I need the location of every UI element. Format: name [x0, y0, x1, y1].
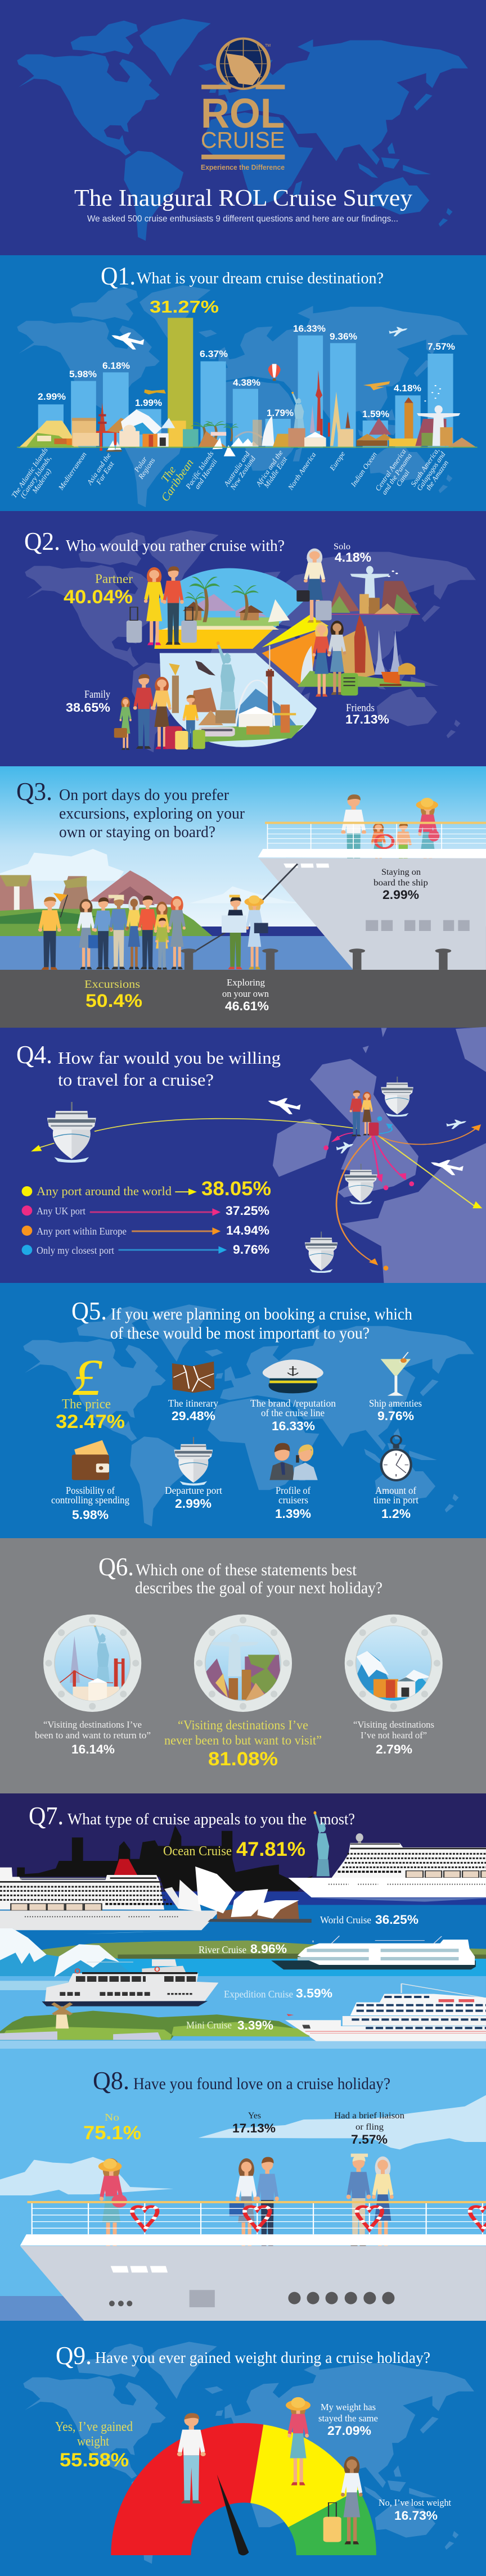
Q9 background — [0, 2321, 486, 2576]
Q9 label: stayed the same — [318, 2402, 378, 2438]
friends pair — [313, 621, 358, 697]
Q1 rotated destination labels: Canal — [394, 468, 411, 488]
Q3 label: exploring — [222, 977, 269, 1013]
ship hull — [258, 794, 486, 970]
Q2 label: solo: Solo — [334, 542, 350, 552]
Q1 rotated destination labels: the Amazon — [424, 459, 450, 492]
panel: Q7 type of cruise — [0, 1793, 486, 2049]
Q1 rotated destination labels: South America, — [409, 446, 441, 488]
Q3 label: exploring: 46.61% — [225, 999, 269, 1013]
Q8 label: brief liaison: or fling — [356, 2122, 384, 2132]
Q2 label: friends — [345, 702, 389, 726]
Q4 heading — [16, 1040, 281, 1090]
Q1 percentage labels: 9.36% — [330, 331, 357, 342]
option: the price — [56, 1349, 125, 1432]
Q5 heading: If you were planning on booking a cruise, which — [111, 1305, 412, 1323]
option: profile of cruisers: 1.39% — [275, 1507, 311, 1521]
Q8 label: no: 75.1% — [83, 2122, 141, 2144]
option: departure port — [165, 1437, 222, 1511]
Q1 rotated destination labels: The Atlantic Islands — [10, 446, 50, 499]
Q1 rotated destination labels: Regions — [136, 457, 156, 481]
Q3 heading: excursions, exploring on your — [59, 805, 245, 822]
partner couple — [127, 566, 197, 645]
Q1 rotated destination labels: Middle East — [262, 455, 289, 490]
ship: mini cruise — [285, 1983, 486, 2041]
statue of liberty — [313, 1811, 330, 1876]
Q1 heading — [101, 261, 384, 290]
option: ship amenities: 9.76% — [377, 1409, 414, 1423]
gauge needle — [217, 2475, 249, 2555]
Q2 pie illustration — [114, 549, 425, 750]
bollards — [181, 948, 451, 970]
Q2 label: family: 38.65% — [66, 701, 110, 715]
option: controlling spending: controlling spending — [51, 1494, 129, 1506]
Q4 heading: to travel for a cruise? — [58, 1070, 214, 1090]
Q1 percentage labels: 16.33% — [293, 323, 326, 334]
Q8 label: yes — [232, 2111, 276, 2135]
option: the itinerary: The itinerary — [168, 1398, 218, 1409]
Q9 label: gained: weight — [77, 2434, 109, 2449]
river banks — [0, 1941, 486, 1958]
Q4 background — [0, 1028, 486, 1283]
Q2 label: partner: Partner — [95, 572, 133, 586]
option: profile of cruisers — [269, 1443, 318, 1521]
Q7 label: ocean cruise — [163, 1838, 305, 1860]
Q1 rotated destination labels: Europe — [327, 450, 346, 472]
hero world map — [17, 19, 468, 241]
Q2 label: solo — [334, 542, 371, 564]
Q7 heading: Q7. — [29, 1801, 64, 1830]
Q2 world map — [25, 530, 476, 752]
panel: Q9 weight gain — [0, 2321, 486, 2576]
Q1 rotated destination labels: Pacific Islands — [183, 449, 215, 491]
Q1 rotated destination labels — [10, 446, 453, 508]
Q9 label: gained: Yes, I’ve gained — [55, 2420, 133, 2434]
ROL Cruise logo: Experience the Difference — [201, 164, 285, 171]
Q1 percentage labels: 6.37% — [200, 349, 228, 359]
Q8 label: no — [83, 2112, 141, 2144]
ship deck and hull — [20, 2234, 486, 2321]
Q3 label: excursions — [84, 978, 142, 1011]
Q7 label: world cruise: World Cruise — [320, 1914, 371, 1926]
Q1 rotated destination labels: The — [159, 464, 178, 485]
solo traveller — [296, 549, 332, 623]
Q1 percentage labels: 7.57% — [428, 341, 455, 352]
option: brand reputation: of the cruise line — [261, 1407, 325, 1418]
Q4 heading: Q4. — [16, 1040, 52, 1069]
Q6 label: not heard of — [353, 1719, 434, 1756]
Q1 rotated destination labels: Madeira) — [30, 467, 53, 495]
Q1 heading: What is your dream cruise destination? — [137, 270, 384, 287]
ROL Cruise logo — [201, 38, 285, 171]
Q7 label: world cruise — [320, 1913, 418, 1927]
Q7 label: mini cruise: Mini Cruise — [186, 2019, 232, 2031]
Q7 scene — [0, 1793, 486, 2049]
Q2 label: partner: 40.04% — [64, 586, 133, 608]
Q9 label: lost weight — [379, 2497, 451, 2523]
Q2 heading: Who would you rather cruise with? — [66, 537, 285, 555]
Q1 percentage labels: 6.18% — [102, 360, 130, 371]
hero background — [0, 0, 486, 255]
Q6 heading: describes the goal of your next holiday? — [135, 1579, 382, 1597]
Q1 rotated destination labels: Australia and — [222, 450, 251, 488]
green island and windmill — [0, 2003, 310, 2040]
Q6 label: never been — [164, 1718, 322, 1770]
Q9 label: gained: 55.58% — [60, 2450, 129, 2471]
Q3 label: staying on board — [374, 867, 428, 902]
Q5 heading — [71, 1296, 412, 1343]
Q3 heading: own or staying on board? — [59, 823, 215, 841]
Q6 label: not heard of: I’ve not heard of” — [361, 1730, 427, 1741]
Q1 percentage labels: 4.38% — [233, 377, 260, 388]
Q1 rotated destination labels: Caribbean — [159, 457, 196, 504]
icon: wallet — [72, 1440, 109, 1480]
Q2 label: solo: 4.18% — [335, 550, 371, 564]
Q6 label: never been: never been to but want to visit” — [164, 1733, 322, 1747]
Q1 heading: Q1. — [101, 261, 136, 290]
Q2 heading: Q2. — [24, 527, 60, 555]
hero title: The Inaugural ROL Cruise Survey — [74, 186, 412, 211]
Q4 heading: How far would you be willing — [58, 1048, 281, 1068]
Q7 label: expedition cruise: 3.59% — [296, 1986, 332, 2000]
Q3 label: exploring: Exploring — [227, 977, 265, 988]
Q4 legend: Only my closest port — [37, 1245, 114, 1256]
icon: martini glass — [381, 1352, 411, 1396]
Q1 rotated destination labels: Africa and the — [254, 449, 285, 489]
heart life rings — [132, 2207, 486, 2230]
porthole: new destinations — [194, 1615, 292, 1712]
Q7 heading: What type of cruise appeals to you the — [68, 1810, 307, 1828]
option: brand reputation — [250, 1359, 336, 1433]
porthole: unknown destinations — [345, 1615, 443, 1712]
Q1 percentage labels — [38, 297, 455, 419]
Q6 heading: Which one of these statements best — [136, 1561, 357, 1579]
Q1 rotated destination labels: and the Panama — [380, 451, 413, 496]
option: controlling spending: Possibility of — [66, 1485, 115, 1496]
option: ship amenities: Ship amenties — [369, 1398, 422, 1409]
Q1 rotated destination labels: (Canary Islands, — [18, 454, 53, 499]
snowy mountains — [0, 1928, 136, 1990]
Q8 heading: Q8. — [93, 2066, 129, 2095]
ship: expedition cruise — [42, 1959, 218, 2006]
option: time in port — [374, 1436, 418, 1521]
option: controlling spending — [51, 1440, 129, 1522]
panel: Q6 holiday goal — [0, 1538, 486, 1793]
man in shorts — [177, 2413, 206, 2503]
Q7 label: world cruise: 36.25% — [375, 1913, 418, 1927]
panel: Q5 most important factors — [0, 1283, 486, 1538]
Q1 percentage labels: 2.99% — [38, 391, 66, 402]
Q1 percentage labels: 1.79% — [267, 408, 294, 418]
Q8 label: brief liaison: Had a brief liaison — [334, 2111, 404, 2121]
Q7 label: ocean cruise: Ocean Cruise — [163, 1844, 232, 1859]
option: time in port: time in port — [374, 1494, 418, 1506]
Q6 background — [0, 1538, 486, 1793]
Q8 background — [0, 2049, 486, 2321]
Q1 rotated destination labels: Indian Ocean — [349, 450, 379, 489]
Q2 label: family: Family — [84, 689, 110, 701]
Q9 gauge chart — [111, 2397, 376, 2555]
ship: ocean cruise left — [0, 1859, 220, 1934]
Q2 label: friends: 17.13% — [345, 712, 389, 726]
Q6 label: never been: “Visiting destinations I’ve — [178, 1718, 308, 1732]
Q1 rotated destination labels: and Hawaii — [192, 457, 219, 491]
water — [0, 2296, 84, 2321]
hero subtitle: We asked 500 cruise enthusiasts 9 different questions and here are our findings... — [87, 214, 398, 224]
Q5 heading: Q5. — [71, 1296, 107, 1325]
Q1 percentage labels: 5.98% — [69, 369, 97, 379]
Q7 heading: most? — [320, 1810, 355, 1828]
Q3 label: staying on board: board the ship — [374, 878, 428, 888]
option: the price: 32.47% — [56, 1411, 125, 1432]
Q9 label: stayed the same: 27.09% — [327, 2424, 371, 2438]
porthole: return destinations — [43, 1615, 141, 1712]
Q8 label: brief liaison: 7.57% — [351, 2132, 388, 2146]
Q1 percentage labels: 1.59% — [362, 409, 389, 419]
woman with sun hat — [286, 2397, 310, 2485]
Q7 label: mini cruise: 3.39% — [237, 2018, 273, 2032]
Q4 legend: Any port within Europe — [37, 1226, 127, 1237]
Q4 legend: 14.94% — [226, 1223, 269, 1237]
option: time in port: Amount of — [375, 1485, 416, 1496]
Q6 label: not heard of: 2.79% — [376, 1742, 412, 1756]
Q3 scene illustration — [0, 794, 486, 971]
Q1 bar chart — [38, 318, 453, 448]
woman with suitcase — [323, 2456, 363, 2545]
Q8 label: brief liaison — [334, 2111, 404, 2146]
Q9 heading: Have you ever gained weight during a cruise holiday? — [95, 2349, 430, 2367]
Q3 label: staying on board: Staying on — [381, 867, 421, 877]
Q1 background — [0, 255, 486, 511]
Q5 heading: of these would be most important to you? — [110, 1324, 370, 1343]
Q6 label: return: 16.14% — [71, 1742, 115, 1756]
Q6 label: return: “Visiting destinations I’ve — [43, 1719, 142, 1730]
option: brand reputation: The brand /reputation — [250, 1398, 336, 1409]
Q9 label: lost weight: 16.73% — [394, 2509, 438, 2523]
panel: Q4 how far would you travel — [0, 1027, 486, 1289]
option: ship amenities — [369, 1352, 422, 1423]
Q1 rotated destination labels: Central America — [374, 447, 408, 492]
tour group — [38, 893, 186, 970]
Q7 label: expedition cruise: Expedition Cruise — [224, 1989, 293, 2000]
Q8 label: yes: Yes — [248, 2111, 261, 2121]
Q1 rotated destination labels: Polar — [132, 455, 149, 474]
family group — [114, 674, 205, 750]
Q1 landmark skyline illustration — [17, 327, 478, 457]
wedge: partner — [127, 566, 305, 649]
icon: stopwatch — [380, 1436, 412, 1481]
Q7 label: river cruise: River Cruise — [199, 1944, 246, 1955]
ship: world cruise right — [288, 1833, 486, 1902]
porthole windows — [43, 1615, 443, 1712]
Q9 label: stayed the same: My weight has — [321, 2402, 376, 2412]
Q2 label: partner — [64, 572, 133, 608]
Q6 label: return — [35, 1719, 151, 1756]
icon: folded map — [172, 1362, 214, 1393]
Q2 background — [0, 511, 486, 766]
Q9 label: gained — [55, 2420, 133, 2471]
Q1 percentage labels: 4.18% — [394, 383, 421, 394]
Q1 rotated destination labels: North America — [286, 450, 318, 492]
mooring rope — [189, 864, 298, 955]
Q7 label: mini cruise — [186, 2018, 273, 2032]
option: the itinerary — [168, 1362, 218, 1423]
Q3 label: excursions: Excursions — [84, 978, 140, 991]
option: the price: The price — [62, 1397, 111, 1412]
Q7 label: ocean cruise: 47.81% — [236, 1838, 305, 1860]
Q2 label: family — [66, 689, 110, 715]
Q5 background — [0, 1283, 486, 1538]
Q1 percentage labels: 31.27% — [150, 297, 219, 317]
Q1 rotated destination labels: Galapagos and — [415, 450, 447, 492]
sydney opera house — [164, 1867, 312, 1923]
travelling couple — [350, 1090, 379, 1136]
city skyline — [17, 1825, 313, 1891]
Q3 dock — [0, 970, 486, 1028]
Q4 legend: 38.05% — [201, 1178, 271, 1200]
icon: two people — [269, 1443, 318, 1480]
option: profile of cruisers: cruisers — [278, 1494, 308, 1506]
option: controlling spending: 5.98% — [72, 1508, 109, 1522]
option: profile of cruisers: Profile of — [276, 1485, 310, 1496]
option: departure port: Departure port — [165, 1485, 222, 1496]
Q1 rotated destination labels: Asia and the — [85, 451, 112, 487]
clouds — [0, 2095, 486, 2195]
Q3 heading — [16, 777, 245, 841]
ROL Cruise logo: CRUISE — [201, 127, 285, 153]
option: the itinerary: 29.48% — [172, 1409, 215, 1423]
deck railing — [27, 2201, 486, 2234]
panel: Q1 dream destination — [0, 255, 486, 511]
gauge: red segment — [111, 2423, 263, 2555]
Q9 label: stayed the same: stayed the same — [318, 2413, 378, 2424]
passengers — [98, 2154, 394, 2251]
Q3 heading: On port days do you prefer — [59, 786, 229, 804]
option: brand reputation: 16.33% — [272, 1419, 315, 1433]
ship: river cruise — [271, 1936, 476, 1969]
Q6 label: return: been to and want to return to” — [35, 1730, 151, 1741]
Q8 ship scene — [0, 2095, 486, 2321]
Q8 label: yes: 17.13% — [232, 2121, 276, 2135]
panel: Q2 who would you cruise with — [0, 511, 486, 766]
Q2 heading — [24, 527, 285, 555]
Q4 legend: Any UK port — [37, 1205, 86, 1217]
Q9 label: lost weight: No, I’ve lost weight — [379, 2497, 451, 2508]
Q3 sky — [0, 766, 486, 927]
Q6 label: not heard of: “Visiting destinations — [353, 1719, 434, 1730]
Q6 label: never been: 81.08% — [208, 1748, 278, 1770]
Q3 label: excursions: 50.4% — [86, 991, 142, 1011]
Q9 heading — [56, 2341, 430, 2370]
Q4 route arrows and ships — [31, 1077, 482, 1273]
panel: Q8 found love on a cruise — [0, 2049, 486, 2321]
Q1 percentage labels: 1.99% — [135, 397, 162, 408]
Q8 label: no: No — [105, 2112, 119, 2123]
section: hero header — [0, 0, 486, 255]
Q3 label: staying on board: 2.99% — [382, 888, 419, 902]
family on deck — [341, 794, 439, 878]
Q1 world map — [17, 285, 468, 507]
Q7 label: river cruise: 8.96% — [250, 1942, 287, 1956]
Q8 heading — [93, 2066, 390, 2095]
Q1 rotated destination labels: Far East — [94, 460, 116, 486]
Q7 label: expedition cruise — [224, 1986, 332, 2000]
option: time in port: 1.2% — [381, 1507, 411, 1521]
Q6 heading — [98, 1552, 382, 1597]
gauge: yellow segment — [250, 2425, 359, 2527]
Q1 rotated destination labels: New Zealand — [228, 454, 257, 492]
wedge: friends — [262, 614, 425, 697]
gauge: green segment — [288, 2489, 376, 2555]
Q6 heading: Q6. — [98, 1552, 134, 1581]
Q9 world map — [23, 2342, 474, 2564]
Q7 label: river cruise — [199, 1942, 287, 1956]
Q4 legend — [22, 1178, 271, 1257]
deck railing — [265, 822, 486, 849]
Q4 legend: Any port around the world — [37, 1184, 172, 1198]
exploring couple — [222, 895, 268, 969]
Q3 heading: Q3. — [16, 777, 52, 806]
panel: Q3 port days — [0, 766, 486, 1028]
icon: captain hat — [263, 1359, 323, 1393]
Q4 map of UK and Europe — [273, 1027, 486, 1289]
Q7 heading — [29, 1801, 355, 1830]
ROL Cruise logo: TM — [265, 44, 271, 48]
option: departure port: 2.99% — [175, 1497, 212, 1511]
Q4 legend: 9.76% — [233, 1242, 269, 1257]
Q8 heading: Have you found love on a cruise holiday? — [133, 2075, 390, 2093]
Q5 world map — [23, 1304, 474, 1526]
icon: cruise ship — [174, 1437, 213, 1485]
Q4 legend: 37.25% — [226, 1204, 269, 1218]
Q3 label: exploring: on your own — [222, 988, 269, 999]
wedge: family — [114, 641, 317, 750]
wedge: solo — [262, 549, 420, 648]
ROL Cruise logo: ROL — [201, 90, 285, 137]
Q9 heading: Q9. — [56, 2341, 92, 2370]
Q1 rotated destination labels: Mediterranean — [56, 450, 88, 492]
Q2 label: friends: Friends — [346, 702, 375, 714]
icon: pound sign: £ — [72, 1349, 103, 1406]
